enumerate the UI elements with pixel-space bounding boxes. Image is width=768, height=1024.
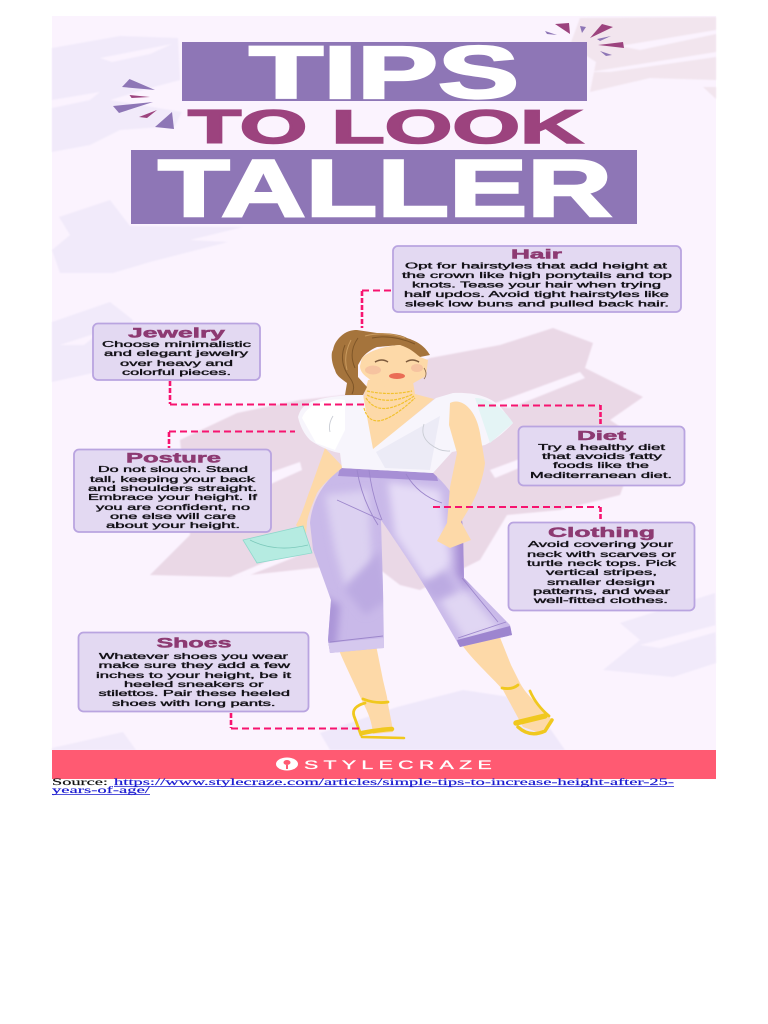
hair — [332, 330, 430, 395]
panel: clothing: vertical stripes, — [546, 567, 657, 577]
connector: jewelry — [170, 381, 367, 404]
panel: posture: you are confident, no — [96, 502, 250, 512]
panel: posture: Posture — [126, 450, 221, 466]
panel: clothing — [508, 522, 694, 610]
panel: diet — [518, 426, 684, 486]
source citation: https://www.stylecraze.com/articles/simple-tips-to-increase-height-after-25- — [114, 777, 674, 787]
source citation: years-of-age/ — [52, 785, 151, 795]
face — [360, 345, 428, 388]
panel: shoes: stilettos. Pair these heeled — [98, 688, 290, 698]
panel: clothing: patterns, and wear — [533, 586, 670, 596]
panel: shoes — [78, 632, 308, 712]
panel: hair: Hair — [511, 246, 562, 262]
panel: clothing: smaller design — [547, 577, 655, 587]
necklaces — [364, 391, 415, 421]
left arm — [296, 448, 343, 534]
cheeks and lips — [365, 366, 381, 374]
source citation — [52, 777, 674, 795]
panel: jewelry: over heavy and — [120, 358, 233, 368]
background brush strokes — [52, 17, 716, 750]
right shoe — [502, 685, 552, 734]
right leg — [460, 630, 552, 733]
footer banner — [52, 750, 716, 779]
connector: posture — [169, 432, 295, 448]
eyes — [375, 360, 419, 362]
panel: posture: tall, keeping your back — [90, 474, 256, 484]
connector: shoes — [231, 713, 360, 728]
right arm — [437, 402, 485, 548]
white top — [298, 393, 513, 473]
panel: clothing: neck with scarves or — [527, 549, 676, 559]
panel: posture: one else will care — [110, 511, 236, 521]
panel: posture: and shoulders straight. — [88, 483, 257, 493]
illustration: woman in white top and lavender pants — [243, 330, 552, 738]
icon: sparkle burst right — [545, 23, 624, 56]
panel: hair: the crown like high ponytails and top — [402, 270, 672, 280]
connector: hair — [362, 290, 393, 328]
title: TIPS: TIPS — [249, 31, 519, 114]
panel: diet: foods like the — [553, 460, 649, 470]
connector: clothing — [433, 507, 600, 521]
panel: jewelry: and elegant jewelry — [104, 348, 249, 358]
title: TALLER: TALLER — [158, 144, 612, 234]
title: TO LOOK: TO LOOK — [188, 100, 583, 153]
panel: hair: half updos. Avoid tight hairstyles like — [404, 289, 669, 299]
panel: posture: Do not slouch. Stand — [98, 464, 248, 474]
panel: shoes: shoes with long pants. — [112, 698, 276, 708]
clutch — [243, 526, 312, 563]
panel: posture — [74, 450, 271, 532]
panel: hair: knots. Tease your hair when trying — [412, 280, 661, 290]
infographic — [52, 16, 716, 796]
panel: posture: about your height. — [106, 520, 240, 530]
panel: shoes: heeled sneakers or — [124, 679, 264, 689]
panel: diet: Diet — [577, 428, 627, 443]
panel: shoes: make sure they add a few — [98, 660, 292, 670]
panel: hair: Opt for hairstyles that add height at — [405, 260, 668, 270]
panel: hair — [393, 246, 681, 312]
title: TALLER — [131, 144, 637, 234]
footer banner: STYLECRAZE — [304, 758, 497, 772]
panel: jewelry: Jewelry — [128, 324, 225, 340]
panel: jewelry — [93, 324, 260, 380]
panel: jewelry: colorful pieces. — [122, 367, 231, 377]
panel: diet: Try a healthy diet — [538, 442, 666, 452]
panel: diet: that avoids fatty — [542, 451, 663, 461]
neck and chest — [363, 376, 434, 450]
panel: shoes: Whatever shoes you wear — [99, 651, 288, 661]
panel: diet: Mediterranean diet. — [530, 470, 672, 480]
panel: clothing: Clothing — [548, 524, 655, 540]
panel: jewelry: Choose minimalistic — [102, 339, 252, 349]
panel: clothing: well-fitted clothes. — [532, 595, 668, 605]
panel: hair: sleek low buns and pulled back hair. — [405, 298, 669, 308]
icon: sparkle burst left — [113, 79, 174, 129]
panel: clothing: turtle neck tops. Pick — [527, 558, 677, 568]
poster background — [52, 16, 716, 750]
connector: diet — [478, 405, 600, 425]
left shoe — [353, 699, 404, 738]
panel: clothing: Avoid covering your — [528, 539, 673, 549]
left leg — [338, 645, 393, 734]
panel: shoes: Shoes — [156, 634, 232, 650]
pants — [310, 468, 512, 653]
source citation: Source: — [52, 777, 108, 787]
panel: shoes: inches to your height, be it — [96, 670, 292, 680]
title: TIPS — [182, 31, 587, 114]
panel: posture: Embrace your height. If — [88, 492, 258, 502]
icon: stylecraze logo — [276, 758, 298, 770]
